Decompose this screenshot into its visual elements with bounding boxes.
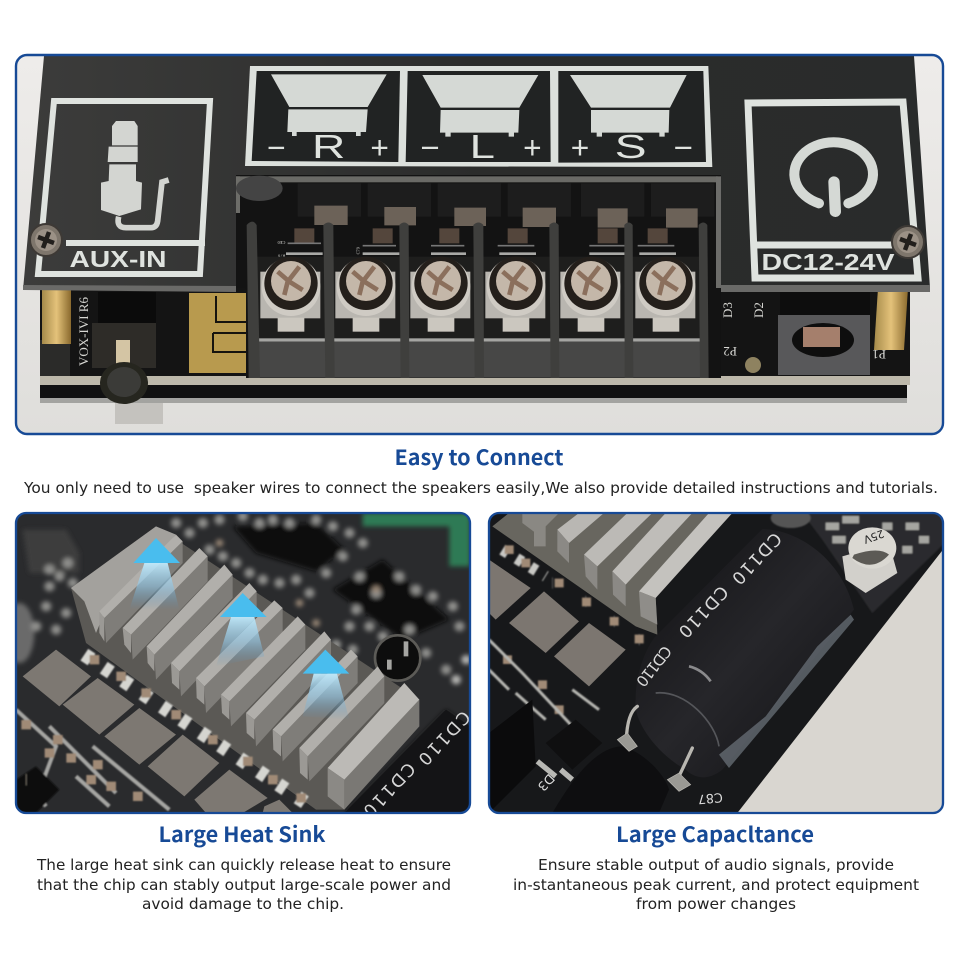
brass standoffs <box>42 288 908 350</box>
DC power jack: D3 <box>720 302 735 318</box>
icon: airflow arrow 1 <box>129 538 180 610</box>
icon: power button <box>748 102 918 278</box>
icon: speaker R <box>271 74 387 136</box>
lower black parts <box>489 700 669 813</box>
channel labels: R <box>312 129 345 166</box>
board labels: C87 <box>697 790 723 807</box>
board labels: D3 <box>535 771 558 794</box>
DC power jack <box>724 302 886 375</box>
channel labels: S <box>615 129 647 166</box>
heading: Large Capacitance: Large Capacltance <box>616 819 814 849</box>
text: heat sink description: avoid damage to the chip. <box>142 895 344 913</box>
panel: terminal photo <box>16 55 943 434</box>
white table surface <box>737 550 943 813</box>
top printed cover plate <box>23 56 930 292</box>
frame <box>245 66 712 167</box>
channel labels: L <box>470 129 495 166</box>
capacitor: CD110 <box>727 528 785 588</box>
icon: airflow arrow 2 <box>216 593 267 666</box>
icon: speaker S <box>570 75 687 137</box>
text: capacitance description: Ensure stable output of audio signals, provide <box>538 856 894 874</box>
mounting screw left <box>30 224 62 256</box>
channel labels: − <box>267 129 286 165</box>
DC power jack: D2 <box>751 302 766 318</box>
inductors <box>489 560 626 686</box>
plate edge shading <box>23 285 930 292</box>
ring component <box>375 635 420 681</box>
capacitor leads <box>617 706 692 791</box>
panel: heat sink photo <box>4 513 474 820</box>
DC power jack: P2 <box>723 344 737 359</box>
heading: Easy to Connect: Easy to Connect <box>394 442 564 472</box>
capacitor: CD110 <box>632 642 675 690</box>
solder strip components <box>16 655 316 813</box>
heat sink fins <box>71 526 419 810</box>
icon: AUX-IN jack: AUX-IN <box>70 246 166 272</box>
speaker output legend <box>245 66 712 167</box>
component cavity: CE0 <box>278 240 285 245</box>
text: capacitance description: from power changes <box>636 895 796 913</box>
inner cells <box>252 71 706 163</box>
panel: capacitor photo <box>489 508 943 813</box>
capacitor <box>632 528 854 777</box>
small components <box>489 550 639 726</box>
icon: airflow arrow 3 <box>303 650 349 720</box>
screw terminals <box>247 222 709 379</box>
heat sink fins <box>522 513 732 625</box>
capacitor lettering <box>359 706 474 820</box>
lower circuit board <box>40 286 910 424</box>
channel labels: − <box>420 129 440 165</box>
text: heat sink description <box>36 856 451 913</box>
text: heat sink description: that the chip can stably output large-scale power and <box>37 876 451 894</box>
heading: Large Heat Sink: Large Heat Sink <box>158 819 326 849</box>
heat sink base <box>492 513 732 635</box>
blurred board components <box>4 513 470 813</box>
upper board components <box>771 508 943 613</box>
channel labels: + <box>523 129 542 165</box>
capacitor lettering: CD110 <box>359 758 419 820</box>
component cavity <box>236 175 721 378</box>
channel labels <box>268 134 692 158</box>
component cavity: C79 <box>355 247 360 254</box>
capacitor: CD110 <box>674 581 732 641</box>
fin base and shadow <box>71 526 419 810</box>
text: capacitance description <box>513 856 919 913</box>
gold antenna trace <box>189 293 248 373</box>
mounting screw right <box>892 226 924 258</box>
channel labels: + <box>370 129 389 165</box>
text: heat sink description: The large heat sink can quickly release heat to ensure <box>36 856 451 874</box>
icon: speaker L <box>422 75 538 137</box>
text: connect description: You only need to use speaker wires to connect the speakers easily,We also provide detailed instructions and tutorials. <box>23 479 938 497</box>
icon: AUX-IN jack <box>38 101 210 274</box>
small silver capacitor: 25V <box>861 527 886 546</box>
capacitor lettering: CD110 <box>414 706 474 769</box>
component cavity: R78 <box>278 253 285 258</box>
small silver capacitor <box>842 527 897 593</box>
lower circuit board: VOX-IVI R6 <box>76 297 91 366</box>
text: capacitance description: in-stantaneous peak current, and protect equipment <box>513 876 919 894</box>
channel labels: + <box>571 129 589 165</box>
board labels <box>535 771 723 807</box>
capacitor edge <box>344 710 470 813</box>
inductors <box>23 650 293 813</box>
channel labels: − <box>674 129 693 165</box>
terminal base strip <box>246 378 721 379</box>
icon: power button: DC12-24V <box>762 249 895 275</box>
DC power jack: P1 <box>872 347 886 362</box>
